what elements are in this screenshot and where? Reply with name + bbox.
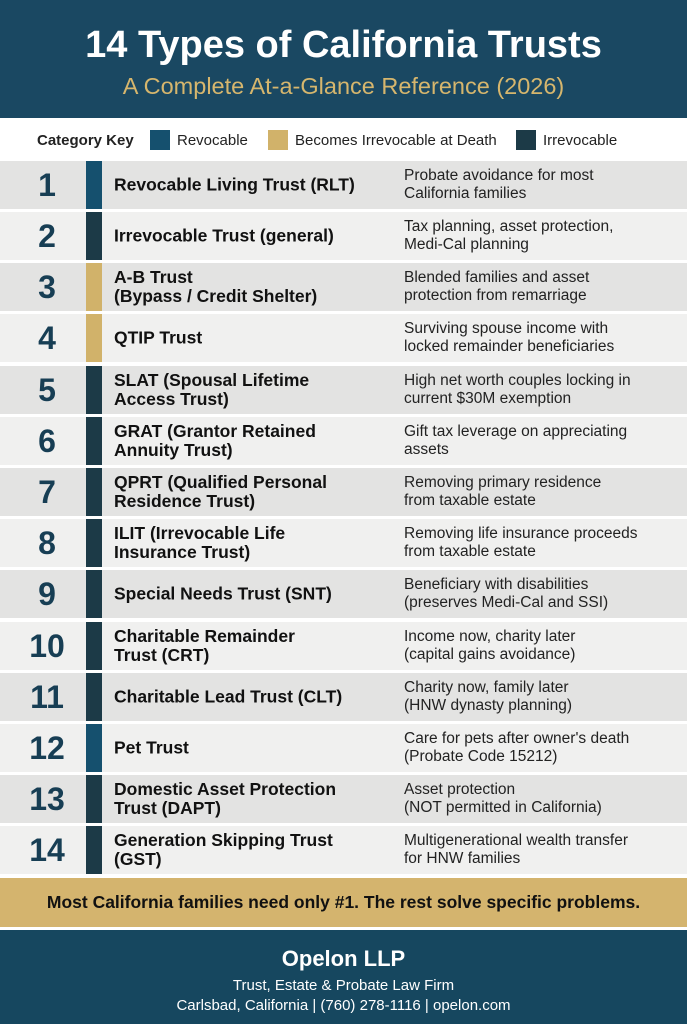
row 10: Trust (CRT) — [114, 645, 209, 665]
row 3: protection from remarriage — [404, 287, 587, 304]
row 1: Revocable Living Trust (RLT) — [114, 174, 355, 194]
row 12: 12 — [29, 730, 65, 766]
row 7: Removing primary residence — [404, 474, 601, 491]
row 13: Trust (DAPT) — [114, 798, 221, 818]
row 4: 4 — [38, 320, 56, 356]
row 2: Irrevocable Trust (general) — [114, 226, 334, 246]
row 9: Beneficiary with disabilities — [404, 576, 588, 593]
footer: Trust, Estate & Probate Law Firm — [233, 977, 454, 994]
row 3: Blended families and asset — [404, 269, 589, 286]
footer — [0, 930, 687, 1024]
row 8: from taxable estate — [404, 543, 536, 560]
category key: Category Key — [37, 132, 134, 149]
row 13 — [0, 775, 687, 823]
row 14: Generation Skipping Trust — [114, 830, 333, 850]
row 14: 14 — [29, 832, 65, 868]
row 11 — [0, 673, 687, 721]
row 6: 6 — [38, 423, 56, 459]
row 12: Care for pets after owner's death — [404, 730, 629, 747]
row 5: 5 — [38, 372, 56, 408]
category key — [37, 130, 617, 150]
row 1 — [0, 161, 687, 209]
row 6: GRAT (Grantor Retained — [114, 421, 316, 441]
row 13: Domestic Asset Protection — [114, 779, 336, 799]
row 7: QPRT (Qualified Personal — [114, 472, 327, 492]
footer: Opelon LLP — [282, 946, 405, 971]
row 9: 9 — [38, 576, 56, 612]
row 12 — [0, 724, 687, 772]
callout banner — [0, 878, 687, 927]
row 1: Probate avoidance for most — [404, 167, 594, 184]
row 11: Charitable Lead Trust (CLT) — [114, 686, 342, 706]
row 8: ILIT (Irrevocable Life — [114, 523, 285, 543]
row 2: Medi-Cal planning — [404, 236, 529, 253]
row 12: Pet Trust — [114, 738, 189, 758]
row 11: Charity now, family later — [404, 679, 569, 696]
row 14: Multigenerational wealth transfer — [404, 832, 628, 849]
row 8: 8 — [38, 525, 56, 561]
row 3: (Bypass / Credit Shelter) — [114, 286, 317, 306]
row 2 — [0, 212, 687, 260]
row 12: (Probate Code 15212) — [404, 748, 557, 765]
row 11: 11 — [30, 679, 64, 715]
category key: Irrevocable — [543, 132, 617, 149]
row 6: assets — [404, 441, 449, 458]
title: 14 Types of California Trusts — [85, 24, 602, 66]
row 8: Insurance Trust) — [114, 542, 250, 562]
callout banner: Most California families need only #1. The rest solve specific problems. — [47, 892, 640, 912]
row 2: 2 — [38, 218, 56, 254]
row 9 — [0, 570, 687, 618]
row 4: Surviving spouse income with — [404, 320, 608, 337]
row 10: Charitable Remainder — [114, 626, 295, 646]
row 7 — [0, 468, 687, 516]
row 13: (NOT permitted in California) — [404, 799, 602, 816]
category key: Becomes Irrevocable at Death — [295, 132, 497, 149]
row 9: (preserves Medi-Cal and SSI) — [404, 594, 608, 611]
header — [0, 0, 687, 118]
row 2: Tax planning, asset protection, — [404, 218, 613, 235]
row 9: Special Needs Trust (SNT) — [114, 584, 332, 604]
category key: Revocable — [177, 132, 248, 149]
row 13: 13 — [29, 781, 65, 817]
row 4: locked remainder beneficiaries — [404, 338, 614, 355]
row 6: Gift tax leverage on appreciating — [404, 423, 627, 440]
row 7: Residence Trust) — [114, 491, 255, 511]
row 3 — [0, 263, 687, 311]
row 5: SLAT (Spousal Lifetime — [114, 370, 309, 390]
row 11: (HNW dynasty planning) — [404, 697, 572, 714]
row 14 — [0, 826, 687, 874]
row 6: Annuity Trust) — [114, 440, 233, 460]
row 1: 1 — [38, 167, 56, 203]
row 5 — [0, 366, 687, 414]
row 13: Asset protection — [404, 781, 515, 798]
row 10: 10 — [29, 628, 65, 664]
row 8 — [0, 519, 687, 567]
row 3: 3 — [38, 269, 56, 305]
row 10: (capital gains avoidance) — [404, 646, 575, 663]
row 14: for HNW families — [404, 850, 520, 867]
row 7: from taxable estate — [404, 492, 536, 509]
row 7: 7 — [38, 474, 56, 510]
row 10 — [0, 622, 687, 670]
row 4: QTIP Trust — [114, 328, 202, 348]
row 6 — [0, 417, 687, 465]
row 4 — [0, 314, 687, 362]
row 8: Removing life insurance proceeds — [404, 525, 637, 542]
row 14: (GST) — [114, 849, 162, 869]
row 5: Access Trust) — [114, 389, 229, 409]
row 3: A-B Trust — [114, 267, 193, 287]
row 1: California families — [404, 185, 526, 202]
row 10: Income now, charity later — [404, 628, 575, 645]
row 5: High net worth couples locking in — [404, 372, 631, 389]
row 5: current $30M exemption — [404, 390, 571, 407]
subtitle: A Complete At-a-Glance Reference (2026) — [123, 73, 564, 99]
footer: Carlsbad, California | (760) 278-1116 | opelon.com — [176, 997, 511, 1014]
